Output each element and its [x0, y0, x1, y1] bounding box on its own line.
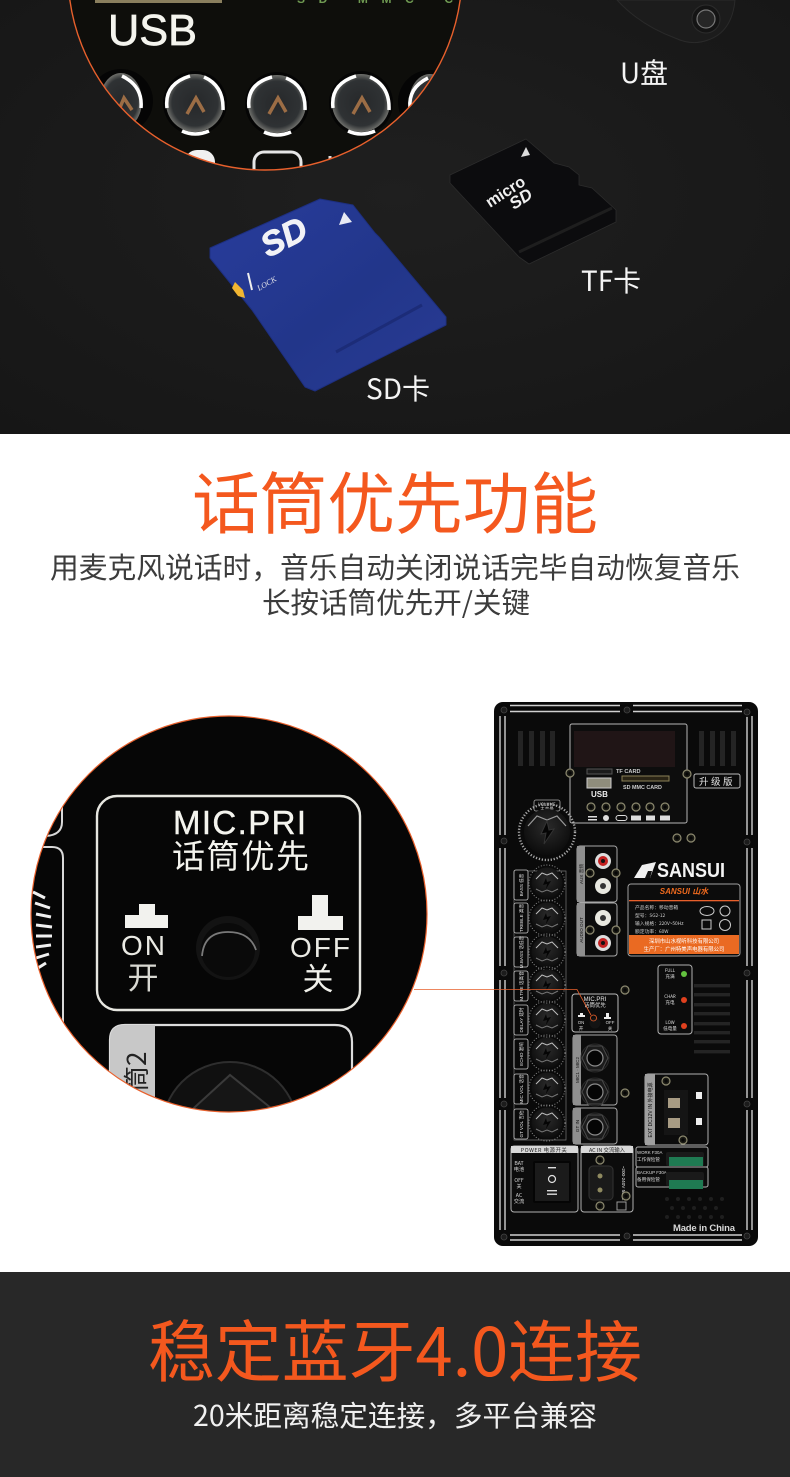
volume knob [519, 800, 575, 860]
product rating label: SANSUI 山水 [660, 887, 709, 896]
fuse holders: BACKUP F30A [637, 1170, 667, 1175]
label: U disk: U盘 [620, 52, 668, 92]
bluetooth description: 20米距离稳定连接，多平台兼容 [193, 1394, 597, 1435]
description text: 长按话筒优先开/关键 [262, 581, 530, 622]
white middle section background [0, 434, 790, 1272]
small mic priority switch: 关 [608, 1025, 613, 1032]
product rating label: 型号：SG2-12 [635, 912, 666, 919]
product rating label: 输入规格：220V~50Hz [635, 920, 684, 927]
fuse holders: WORK F30A [637, 1150, 662, 1155]
on symbol [121, 904, 168, 998]
on symbol: 开 [128, 953, 158, 998]
battery LEDs: 充电 [665, 999, 675, 1006]
dial ticks [33, 892, 52, 968]
mic.pri outlined box: 话筒优先 [172, 830, 309, 878]
neighbouring panel outlines [43, 807, 64, 1022]
SANSUI logo [634, 860, 725, 882]
upgrade badge: 升级版 [699, 774, 735, 788]
media player module [566, 724, 691, 823]
dark top section: storage media [0, 0, 790, 434]
magnified mic priority circle [30, 715, 428, 1113]
jack bulbs [89, 69, 462, 136]
product rating label: 深圳市山水视听科技有限公司 [649, 937, 719, 945]
speaker holes [665, 1197, 724, 1219]
power switch: 电池 [514, 1165, 524, 1173]
AC input: AC IN 交流输入 [589, 1146, 626, 1154]
product rating label [628, 884, 740, 956]
battery LEDs: CHAR [664, 994, 676, 1000]
small mic priority switch: OFF [606, 1020, 615, 1025]
power switch: AC [516, 1192, 523, 1199]
magnified USB port circle [68, 0, 462, 184]
vents [518, 731, 736, 766]
power switch: POWER 电源开关 [521, 1146, 567, 1154]
dark bottom section [0, 1272, 790, 1477]
small mic priority switch: 话筒优先 [584, 1001, 606, 1009]
icon: SD card [210, 199, 446, 391]
volume knob: VOLUME [538, 802, 556, 808]
mic jack panel: 筒2 [117, 1052, 154, 1092]
small mic priority switch: 开 [579, 1026, 584, 1032]
RCA inputs [577, 834, 695, 956]
off symbol: OFF [290, 932, 350, 963]
AC input [581, 1146, 633, 1212]
tone knobs: MIC VOL 话音 [518, 1074, 525, 1104]
amplifier panel [494, 702, 758, 1246]
SANSUI logo: SANSUI [657, 860, 725, 882]
on symbol: ON [121, 930, 165, 961]
tone knobs: TREBLE 高音 [518, 903, 525, 932]
power switch: 关 [516, 1183, 522, 1190]
battery LEDs [658, 965, 692, 1034]
microphone jacks: MIC1 · MIC2 [575, 1057, 580, 1083]
product rating label: 产品名称：移动音箱 [635, 904, 678, 911]
volume knob: 主音量 [540, 806, 554, 812]
battery LEDs: LOW [665, 1020, 675, 1026]
power switch: 交流 [514, 1197, 524, 1205]
microphone jacks: GT IN [575, 1120, 580, 1132]
off symbol [290, 895, 350, 999]
magnified USB port circle: USB [108, 6, 197, 55]
power switch: BAT [514, 1160, 524, 1167]
made in china: Made in China [673, 1223, 736, 1234]
media player module: USB [591, 790, 608, 799]
fuse holders: 工作保险管 [637, 1156, 660, 1163]
icon: SD card: SD [254, 210, 314, 265]
RCA inputs: AUX 音频 [578, 864, 585, 884]
push button [196, 916, 260, 980]
off symbol: 关 [302, 954, 334, 999]
tone knobs: DELAY 延时 [518, 1007, 525, 1033]
battery LEDs: FULL [665, 968, 676, 974]
product rating label: 额定功率：60W [635, 928, 669, 935]
tone knobs: M.BASS 话低音 [518, 935, 525, 968]
tone knobs: BASS 低音 [518, 873, 525, 896]
tone knobs: ECHO 混响 [518, 1042, 525, 1066]
power switch [511, 1146, 578, 1212]
tone knobs [514, 865, 566, 1141]
tone knobs: GT VOL 吉他 [518, 1110, 525, 1138]
media player module: TF CARD [616, 769, 641, 775]
screws [499, 705, 752, 1242]
external DC input [645, 1074, 708, 1145]
battery LEDs: 低电量 [663, 1025, 677, 1032]
icon: SD card: LOCK [255, 274, 279, 293]
power switch: OFF [514, 1177, 524, 1184]
leader line [414, 990, 596, 1021]
battery LEDs: 充满 [665, 973, 675, 980]
AC input: ~200-240V 50Hz [621, 1166, 626, 1201]
description text [50, 546, 740, 622]
small mic priority switch: MIC.PRI [584, 997, 607, 1003]
external DC input: EXT DC12V IN 外接电源 [647, 1083, 654, 1137]
media player module: SD MMC CARD [623, 785, 662, 791]
mic.pri outlined box: MIC.PRI [173, 804, 306, 841]
mic jack panel [108, 1024, 354, 1112]
tone knobs: M.TRE 话高音 [518, 971, 525, 1001]
RCA inputs: AUDIO OUT [579, 917, 584, 943]
heading: bluetooth: 稳定蓝牙4.0连接 [148, 1299, 642, 1396]
label: TF card: TF卡 [581, 260, 641, 300]
label: SD card: SD卡 [366, 368, 430, 408]
icon: microSD card: SD [506, 185, 536, 213]
horizontal vent [694, 984, 730, 1053]
icon: microSD card: micro [483, 173, 529, 211]
heading: mic priority: 话筒优先功能 [192, 451, 598, 548]
icon: USB flash drive [617, 0, 735, 43]
product rating label: 生产厂：广州特美声电器有限公司 [644, 945, 724, 953]
microphone jacks [573, 1035, 629, 1144]
icon: microSD card [450, 139, 616, 264]
fuse holders: 备用保险管 [637, 1176, 660, 1183]
rails [500, 706, 752, 1240]
description text: 用麦克风说话时，音乐自动关闭说话完毕自动恢复音乐 [50, 546, 740, 587]
small mic priority switch [572, 994, 618, 1032]
fuse holders [636, 1147, 708, 1189]
small mic priority switch: ON [578, 1020, 584, 1025]
mic.pri outlined box [97, 796, 360, 1010]
